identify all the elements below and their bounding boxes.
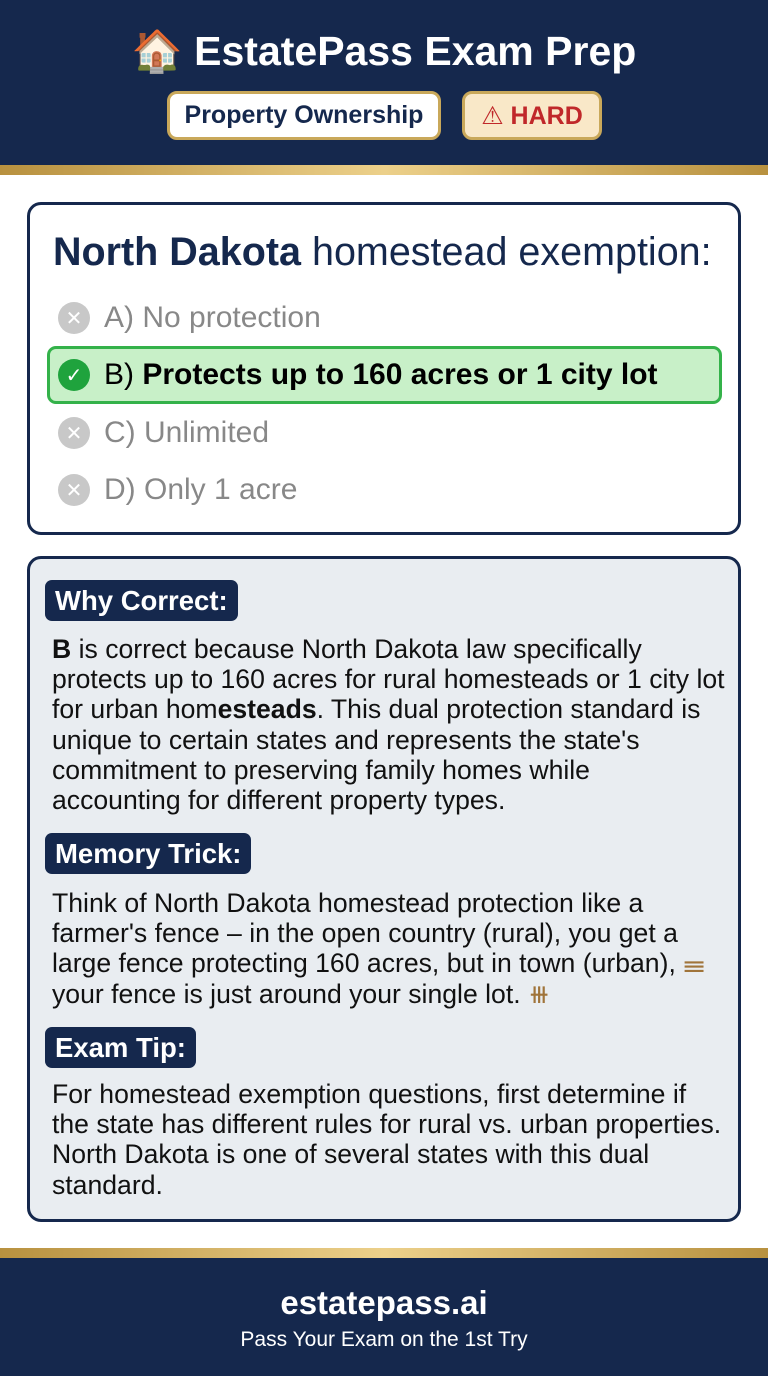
option D: D) Only 1 acre: [104, 473, 297, 506]
title: 🏠 EstatePass Exam Prep: [132, 28, 636, 74]
text: B): [104, 358, 134, 391]
text: why correct: B is correct because North Dakota law specifically: [52, 634, 642, 664]
pill: difficulty: [462, 91, 602, 140]
text: memory trick: [52, 888, 705, 1009]
text: exam tip: North Dakota is one of several states with this dual: [52, 1139, 649, 1169]
text: why correct: commitment to preserving family homes while: [52, 755, 590, 785]
text: why correct: unique to certain states and represents the state's: [52, 725, 640, 755]
label: memory trick: [45, 833, 251, 874]
label: why correct: Why Correct:: [55, 584, 228, 616]
pill: category: Property Ownership: [185, 101, 423, 129]
text: exam tip: standard.: [52, 1170, 163, 1200]
label: why correct: [45, 580, 238, 621]
footer: [0, 1248, 768, 1376]
option C: ✕: [66, 422, 82, 444]
text: why correct: [52, 634, 725, 815]
question card: [27, 202, 741, 535]
text: why correct: protects up to 160 acres for rural homesteads or 1 city lot: [52, 664, 725, 694]
text: memory trick: Think of North Dakota homestead protection like a: [52, 888, 643, 918]
label: exam tip: [45, 1027, 196, 1068]
text: why correct: accounting for different property types.: [52, 785, 505, 815]
option D: ✕: [66, 480, 82, 502]
option A: ✕: [66, 308, 82, 330]
label: memory trick: Memory Trick:: [55, 838, 241, 868]
text: memory trick: large fence protecting 160 acres, but in town (urban), 𝍢: [52, 948, 705, 978]
label: exam tip: Exam Tip:: [55, 1032, 186, 1062]
pill: category: [167, 91, 441, 140]
option B correct: [47, 346, 722, 404]
option A: A) No protection: [104, 301, 321, 334]
text: ✓: [66, 364, 82, 386]
text: Protects up to 160 acres or 1 city lot: [142, 358, 658, 391]
footer tagline: Pass Your Exam on the 1st Try: [240, 1328, 528, 1351]
text: exam tip: [52, 1079, 721, 1200]
text: why correct: for urban homesteads. This dual protection standard is: [52, 694, 700, 724]
text: exam tip: For homestead exemption questions, first determine if: [52, 1079, 686, 1109]
text: exam tip: the state has different rules for rural vs. urban properties.: [52, 1109, 721, 1139]
option C: C) Unlimited: [104, 416, 269, 449]
text: memory trick: farmer's fence – in the open country (rural), you get a: [52, 918, 678, 948]
footer brand: estatepass.ai: [280, 1284, 488, 1321]
header: [0, 0, 768, 175]
explanation panel: [27, 556, 741, 1222]
pill: difficulty: ⚠ HARD: [481, 102, 583, 130]
question: North Dakota homestead exemption:: [53, 230, 712, 274]
text: memory trick: your fence is just around your single lot. ⧻: [52, 979, 550, 1009]
